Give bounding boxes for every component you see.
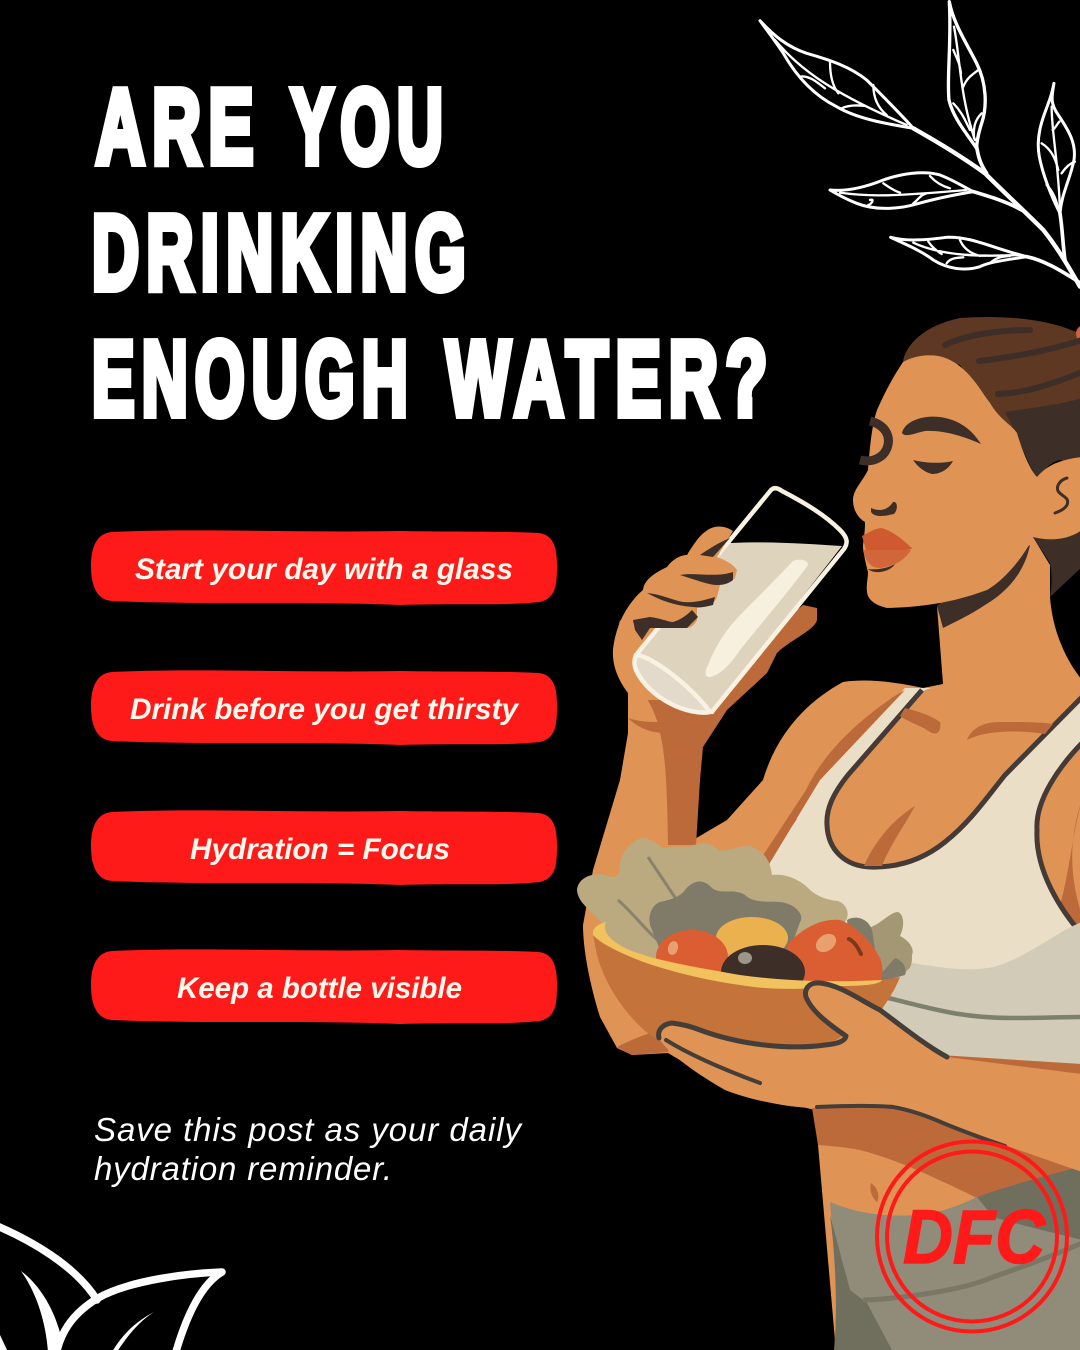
tip: start your day: Start your day with a glass: [135, 553, 513, 586]
chest shadows: [864, 708, 1053, 866]
icon: leaf branch top right: [760, 2, 1080, 287]
title: ENOUGH: [92, 320, 415, 438]
belly shadow: [812, 1105, 1080, 1198]
tip: keep bottle visible: Keep a bottle visible: [177, 972, 462, 1005]
title: YOU: [291, 68, 450, 186]
back hair: [1033, 530, 1080, 597]
footer reminder text: hydration reminder.: [94, 1150, 392, 1187]
armhole shadow: [1060, 800, 1080, 936]
eye: [913, 460, 953, 474]
ear detail: [1055, 478, 1068, 513]
title: DRINKING: [92, 194, 473, 312]
tip: drink before thirsty: [91, 670, 557, 745]
back lettuce: [577, 838, 848, 960]
illustration: woman drinking water: [577, 317, 1080, 1350]
dark hair: [1005, 398, 1080, 478]
bowl: [593, 935, 900, 1052]
hand and forearm fill: [659, 983, 1080, 1172]
top stripe: [888, 998, 1080, 1018]
far brow: [860, 421, 888, 461]
tip: drink before thirsty: Drink before you get thirsty: [130, 693, 519, 726]
ponytail tie: [1076, 325, 1080, 345]
hair strands: [945, 330, 1080, 394]
lettuce veins: [618, 857, 678, 942]
tip: keep bottle visible: [91, 949, 557, 1024]
glass outline: [636, 488, 847, 713]
forearm underside line: [817, 1106, 1005, 1146]
tip: hydration focus: Hydration = Focus: [190, 833, 450, 866]
shadow under top: [940, 1055, 1080, 1078]
salad bowl: [577, 838, 913, 1052]
skin in neckline: [827, 680, 1080, 867]
finger line: [666, 1040, 760, 1083]
bowl rim: [593, 922, 882, 989]
face: [853, 355, 1080, 608]
left tomato: [656, 930, 728, 984]
elbow shadow: [617, 1025, 675, 1055]
brow: [902, 417, 981, 444]
plum: [721, 945, 805, 999]
head: [853, 317, 1080, 608]
trousers shadows: [830, 1166, 1080, 1350]
icon: leaf bottom left: [0, 1225, 222, 1350]
armhole: [1037, 740, 1080, 938]
navel: [870, 1183, 878, 1202]
finger shadows: [633, 538, 733, 640]
lower top panel: [880, 922, 1080, 1064]
glass base: [634, 655, 710, 713]
tip: start your day: [91, 530, 557, 605]
logo: DFC stamp: DFC: [903, 1195, 1046, 1280]
hand outline: [659, 983, 947, 1057]
shoulder shadow: [760, 690, 905, 866]
small grey lettuce: [847, 918, 906, 982]
body and arm skin: [583, 537, 1080, 1350]
lips: [862, 528, 912, 550]
left edge outline of top: [767, 818, 795, 860]
trousers: [830, 1166, 1080, 1350]
fruit highlights: [666, 930, 861, 964]
yellow fruit: [716, 917, 788, 959]
neckline outline: [827, 690, 1080, 867]
panel: tip pills: [91, 530, 557, 1024]
logo: DFC stamp: [877, 1142, 1067, 1332]
grey lettuce: [649, 882, 801, 950]
armhole outline: [1037, 740, 1080, 938]
title: ARE: [96, 68, 261, 186]
footer reminder text: [94, 1111, 524, 1187]
footer reminder text: Save this post as your daily: [94, 1111, 524, 1148]
water: [635, 542, 842, 713]
neck shadow: [937, 545, 1030, 628]
hair: [903, 317, 1080, 470]
palm below the glass: [613, 570, 700, 700]
glass: [634, 488, 847, 713]
tip: hydration focus: [91, 810, 557, 885]
nose shadow: [871, 502, 897, 516]
title: WATER?: [446, 320, 775, 438]
forearm and hand shadow: [640, 605, 817, 845]
top (cream): [760, 688, 1080, 1072]
title: [92, 68, 775, 438]
right tomato: [787, 920, 882, 990]
highlight: [706, 560, 808, 677]
right lettuce: [865, 912, 913, 982]
fingers: [613, 527, 737, 653]
holding hand: [659, 983, 1080, 1172]
